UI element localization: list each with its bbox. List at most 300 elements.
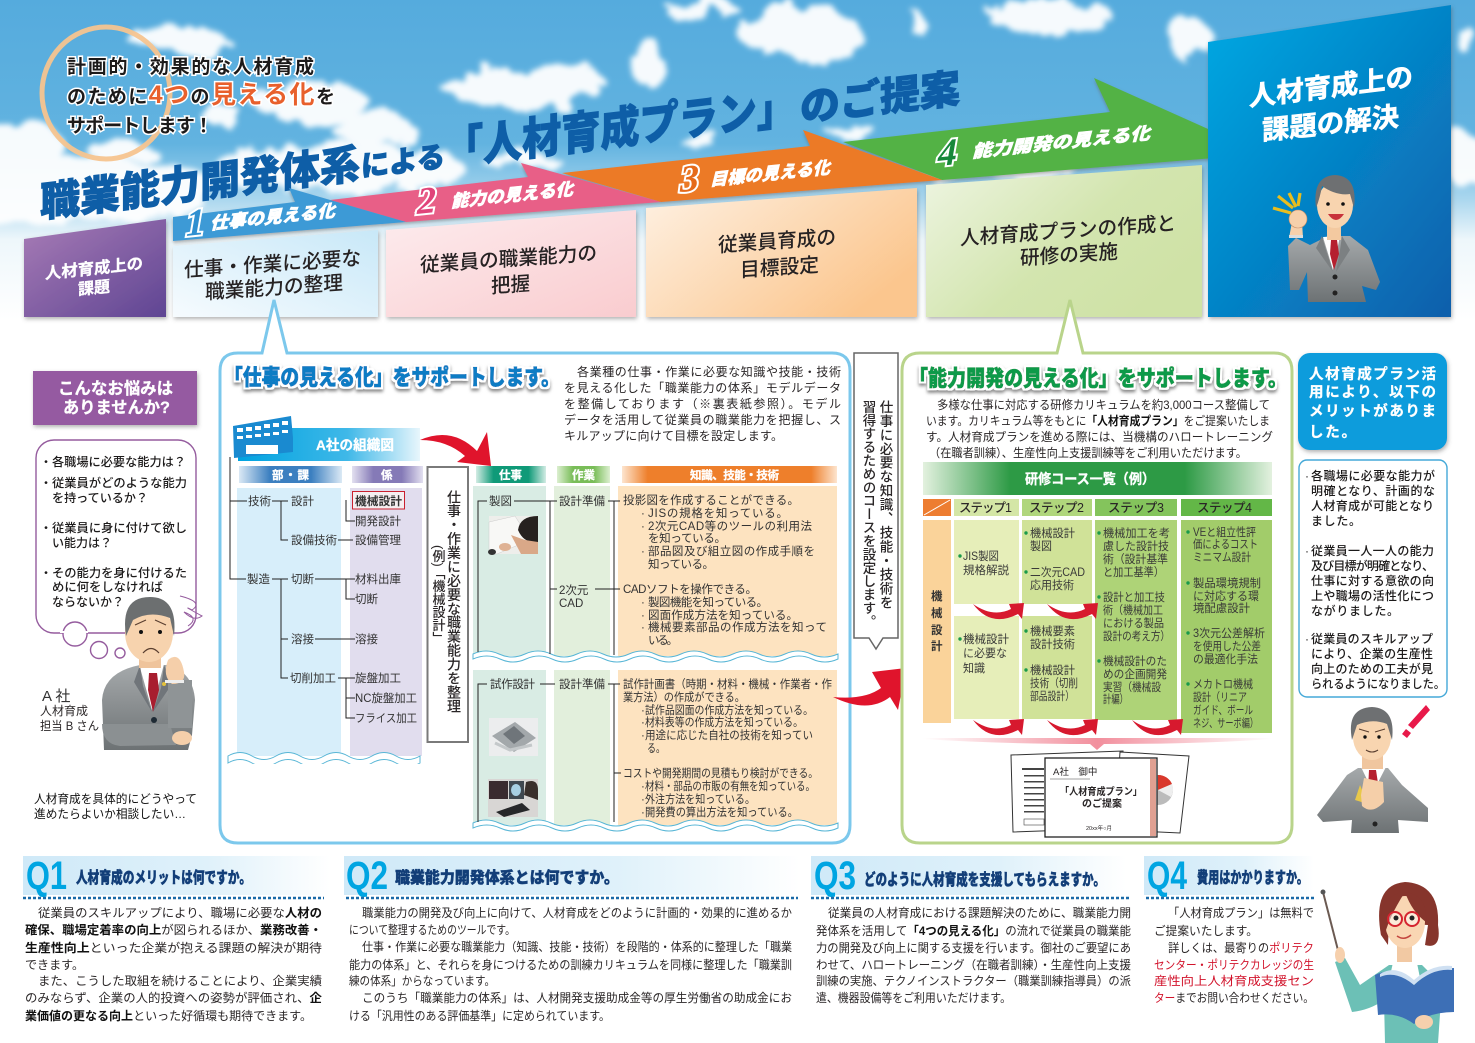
label 1: 仕事の見える化 [210, 201, 337, 233]
Q4: Q4 [1147, 854, 1188, 898]
skills text: を知っている。 [648, 531, 726, 545]
consultation note [34, 791, 197, 821]
skills text: 外注方法を知っている。 [645, 792, 755, 806]
panel intro [564, 364, 841, 443]
column headers: 係 [381, 468, 393, 482]
step 2 courses: 設計技術 [1030, 637, 1075, 651]
org labels: 切断 [291, 573, 314, 586]
step headers: ステップ1 [959, 501, 1012, 515]
panel intro: す。人材育成プランを進める際には、当機構のハロートレーニング [926, 429, 1273, 444]
icon: cheering man [1273, 175, 1380, 302]
Q4: 「人材育成プラン」は無料で [1168, 905, 1314, 920]
worry list: ・ [40, 566, 52, 580]
step 2 courses: 製図 [1030, 539, 1052, 553]
org chart header [233, 416, 420, 461]
skills text: 材料表等の作成方法を知っている。 [645, 715, 803, 729]
Q4: ターまでお問い合わせください。 [1154, 991, 1314, 1005]
main title: 「人材育成プラン」 [444, 81, 796, 175]
panel: skills development [902, 300, 1292, 843]
Q2: について整理するためのツールです。 [349, 923, 515, 937]
job and task labels: 設計準備 [559, 677, 605, 691]
person caption: A 社 [42, 688, 70, 705]
label 4 [937, 111, 1152, 175]
Q2: 仕事・作業に必要な職業能力（知識、技能・技術）を段階的・体系的に整理した「職業 [362, 939, 792, 954]
front cover: A社 御中 [1053, 766, 1097, 778]
lead copy with peach circle [42, 27, 335, 159]
box: challenge [24, 219, 166, 317]
vertical label: organize skills: 仕事・作業に必要な職業能力を整理 [446, 490, 462, 713]
step 3 courses: 機械加工を考 [1103, 526, 1170, 540]
skills text: · [641, 781, 645, 793]
step 2 courses: 応用技術 [1030, 578, 1074, 592]
skills text: · [641, 597, 645, 609]
merit heading: した。 [1309, 424, 1356, 441]
step 4 courses: の最適化手法 [1193, 652, 1258, 666]
step 4 courses: 価によるコスト [1193, 538, 1258, 551]
panel intro: います。カリキュラム等をもとに「人材育成プラン」をご提案いたしま [926, 413, 1270, 428]
step 4 courses: 設計（リニア [1193, 690, 1247, 704]
step 3 courses: 設計と加工技 [1103, 590, 1165, 604]
skills text: 試作計画書（時期・材料・機械・作業者・作 [623, 677, 832, 691]
panel intro: を整備しております（※裏表紙参照）。モデル [564, 396, 841, 411]
worry list [40, 454, 187, 609]
Q2: 練の体系」からなっています。 [349, 974, 495, 988]
worry list: い能力は？ [52, 535, 112, 550]
sheet: pie chart [1115, 752, 1189, 833]
table lines [478, 501, 621, 822]
step 3 courses: における製品 [1103, 616, 1164, 630]
consultation note: 人材育成を具体的にどうやって [34, 791, 197, 806]
vertical label: set courses [854, 353, 898, 649]
panel intro: を見える化した「職業能力の体系」モデルデータ [564, 380, 841, 395]
Q1: Q1 [26, 854, 67, 898]
merit list: 上や職場の活性化につ [1311, 588, 1434, 603]
worry list: 各職場に必要な能力は？ [52, 454, 186, 469]
label 2: 2 [416, 179, 436, 223]
skills text: · [641, 521, 645, 533]
step 3 courses: 機械設計のた [1103, 654, 1167, 668]
step 4 courses [1186, 525, 1265, 730]
step 4 courses: を使用した公差 [1193, 639, 1261, 653]
merit heading [1298, 353, 1447, 450]
box 4 [926, 165, 1202, 317]
org labels: 製造 [247, 572, 270, 586]
merit list: · [1305, 544, 1309, 558]
org labels: 旋盤加工 [355, 671, 401, 685]
arrow: org chart to skills table [420, 432, 491, 466]
skills text: · [641, 546, 645, 558]
scribble [180, 596, 202, 626]
consultation note: 進めたらよいか相談したい… [34, 807, 186, 821]
label 2 [416, 164, 575, 223]
step 4 courses: 境配慮設計 [1193, 601, 1250, 615]
proposal documents [1011, 751, 1189, 837]
sheet: schedule [1011, 751, 1125, 832]
step 3 courses: 術（設計基準 [1103, 552, 1168, 566]
step 3 courses: 計編） [1103, 692, 1128, 706]
Q1 [23, 854, 330, 1023]
box 4: 人材育成プランの作成と [960, 212, 1176, 250]
row label: 計 [931, 639, 943, 653]
Q2: 職業能力の開発及び向上に向けて、人材育成をどのように計画的・効果的に進めるか [362, 905, 792, 920]
box 3: 従業員育成の [718, 226, 836, 257]
step 4 courses: 3次元公差解析 [1193, 626, 1265, 640]
Q4: 詳しくは、最寄りのポリテク [1168, 940, 1314, 955]
icon: worried man [102, 596, 202, 750]
Q1: のみならず、企業の人的投資への姿勢が評価され、 企 [25, 990, 322, 1005]
Q1: 従業員のスキルアップにより、職場に必要な 人材の [38, 905, 322, 920]
Q4 [1144, 854, 1316, 1005]
right column: merits [1298, 353, 1447, 833]
exclamation mark [1402, 705, 1430, 738]
org labels: 開発設計 [355, 514, 401, 528]
skills text: · [641, 705, 645, 717]
Q1: できます。 [25, 958, 84, 972]
step 1 courses [958, 549, 1009, 675]
skills text: · [641, 508, 645, 520]
person caption [40, 688, 99, 733]
merit list: られるようになりました。 [1311, 677, 1445, 691]
photo: machine model [489, 718, 538, 756]
person caption: 担当 B さん [40, 719, 99, 733]
Q2: Q2 [346, 854, 388, 898]
step 2 courses: 二次元CAD [1030, 566, 1085, 579]
Q3: 訓練の実施、テクノインストラクター（職業訓練指導員）の派 [816, 973, 1131, 988]
org labels: 溶接 [291, 633, 314, 646]
panel intro: （在職者訓練）、生産性向上支援訓練等をご利用いただけます。 [929, 445, 1247, 460]
skills text: コストや開発期間の見積もり検討ができる。 [623, 766, 818, 780]
Q3: Q3 [814, 854, 856, 898]
label 3 [679, 143, 832, 201]
person caption: 人材育成 [40, 703, 88, 718]
main title: のご提案 [800, 66, 960, 131]
label 4: 4 [937, 131, 957, 175]
Q4: 産性向上人材育成支援セン [1154, 973, 1314, 988]
skills text: 開発費の算出方法を知っている。 [645, 805, 798, 819]
step 2 courses: 機械設計 [1030, 663, 1075, 677]
column headers [239, 466, 423, 483]
merit list: 及び目標が明確となり、 [1311, 558, 1434, 573]
skills table [473, 466, 838, 831]
skills text: 業方法）の作成ができる。 [623, 690, 745, 704]
arrow 1 [173, 188, 406, 241]
worry list: 従業員に身に付けて欲し [52, 520, 187, 535]
lead copy with peach circle: サポートします！ [67, 114, 213, 137]
Q1: 生産性向上 といった企業が抱える課題の解決が期待 [25, 940, 322, 955]
Q4: センター・ポリテクカレッジの生 [1154, 958, 1314, 972]
org labels: 材料出庫 [355, 572, 401, 586]
box 4: 研修の実施 [1020, 240, 1118, 270]
box 3 [646, 188, 917, 317]
step 4 courses: ミニマム設計 [1193, 550, 1251, 564]
box 1 [173, 230, 378, 317]
skills text: 機械要素部品の作成方法を知って [648, 620, 827, 634]
Q1: また、こうした取組を続けることにより、企業実績 [38, 973, 322, 988]
Q2: ける「汎用性のある評価基準」に定められています。 [349, 1008, 610, 1023]
org columns [228, 488, 424, 772]
Q3: どのように人材育成を支援してもらえますか。 [864, 870, 1105, 889]
skills text: · [641, 794, 645, 806]
table headers: 仕事 [499, 468, 522, 482]
Q4: 費用はかかりますか。 [1197, 868, 1308, 887]
Q1: 人材育成のメリットは何ですか。 [76, 868, 251, 887]
column headers: 部・課 [272, 468, 310, 482]
step boxes [24, 165, 1202, 317]
box 3: 目標設定 [740, 253, 819, 282]
step 1 courses: 機械設計 [963, 632, 1009, 646]
merit list: · [1305, 469, 1309, 483]
Q3: 発体系を活用して「4つの見える化」の流れで従業員の職業能 [816, 924, 1131, 938]
result heading [1249, 61, 1413, 146]
label 3: 目標の見える化 [710, 158, 832, 190]
panel heading: 「能力開発の見える化」をサポートします。 [909, 366, 1287, 391]
Q2: 能力の体系」と、それらを身につけるための訓練カリキュラムを同様に整理した「職業訓 [349, 957, 792, 972]
icon: man with exclamation [1317, 705, 1430, 833]
job and task labels: CAD [559, 598, 583, 610]
worry list: ・ [40, 521, 52, 535]
merit list [1299, 460, 1447, 697]
skills text [623, 493, 832, 819]
box 1: 職業能力の整理 [205, 271, 343, 304]
step 3 courses: 実習（機械設 [1103, 680, 1161, 694]
worry list: ・ [40, 455, 52, 469]
progress arrows [973, 603, 1183, 735]
step 4 courses: VEと組立性評 [1193, 525, 1256, 539]
course cells [923, 520, 1272, 733]
step 1 courses: に必要な [963, 647, 1007, 660]
merit list: 向上のための工夫が見 [1311, 661, 1433, 676]
table columns [473, 486, 838, 831]
lead copy with peach circle: 計画的・効果的な人材育成 [67, 55, 314, 78]
box: challenge: 課題 [78, 278, 110, 299]
result panel [1208, 5, 1451, 317]
step 2 courses: 機械設計 [1030, 526, 1075, 540]
table headers: 作業 [572, 468, 595, 482]
skills text: · [641, 622, 645, 634]
arrow labels [186, 111, 1152, 245]
step 4 courses: に対応する環 [1193, 590, 1259, 603]
step 4 courses: メカトロ機械 [1193, 677, 1253, 691]
result heading: 課題の解決 [1262, 101, 1399, 146]
step 1 courses: 知識 [963, 661, 985, 675]
panel intro: 多様な仕事に対応する研修カリキュラムを約3,000コース整備して [937, 397, 1270, 412]
merit list: 従業員のスキルアップ [1311, 631, 1433, 646]
org labels: NC旋盤加工 [355, 691, 417, 705]
course table [923, 462, 1272, 750]
step arrows [173, 78, 1264, 241]
org labels: 切削加工 [290, 671, 336, 685]
merit list: 各職場に必要な能力が [1311, 468, 1435, 483]
icon: woman with pointer and book [1320, 882, 1454, 1043]
Q4: ご提案いたします。 [1154, 923, 1258, 938]
table headers: 知識、技能・技術 [690, 468, 780, 482]
org labels: 機械設計 [355, 494, 403, 508]
merit heading: 用により、以下の [1309, 384, 1436, 401]
skills text: 試作品図面の作成方法を知っている。 [645, 703, 813, 717]
arrow 3 [562, 130, 942, 202]
panel: job visualization [220, 300, 850, 843]
skills text: · [641, 717, 645, 729]
skills text: · [641, 610, 645, 622]
table headers [476, 466, 837, 483]
org chart header: A社の組織図 [316, 437, 394, 453]
worry list: ・ [40, 476, 52, 490]
main title: による [361, 141, 445, 184]
worry heading: ありませんか? [63, 398, 170, 417]
thought bubble [36, 440, 196, 658]
org labels: 設備技術 [291, 533, 337, 547]
step 3 courses: 設計の考え方） [1103, 629, 1170, 643]
panel frame with pointer [902, 300, 1292, 843]
sky background with clouds [0, 0, 1475, 320]
skills text: 知っている。 [648, 557, 714, 571]
skills text: 製図機能を知っている。 [648, 595, 768, 609]
org labels: フライス加工 [355, 712, 417, 725]
box 2: 把握 [491, 272, 530, 298]
step 3 courses [1097, 526, 1170, 706]
arrow 4 [843, 78, 1264, 180]
skills text: る。 [647, 743, 665, 755]
skills text: いる。 [648, 635, 678, 647]
skills text: 図面作成方法を知っている。 [648, 608, 798, 622]
step 4 courses: 製品環境規制 [1193, 576, 1261, 590]
label 2: 能力の見える化 [451, 179, 575, 211]
front cover: のご提案 [1082, 797, 1122, 810]
step headers: ステップ2 [1029, 501, 1084, 515]
arrow: skills table to course list [833, 668, 906, 710]
front cover: 「人材育成プラン」 [1060, 785, 1142, 798]
Q3: 遣、機器設備等をご利用いただけます。 [816, 990, 1011, 1005]
main title: 職業能力開発体系 [40, 141, 360, 226]
lead copy with peach circle: のために4つの見える化を [67, 81, 335, 109]
Q2: このうち「職業能力の体系」は、人材開発支援助成金等の厚生労働省の助成金にお [362, 991, 792, 1005]
skills text: 2次元CAD等のツールの利用法 [648, 519, 812, 533]
skills text: 投影図を作成することができる。 [623, 493, 799, 507]
step 3 courses: 術（機械加工 [1103, 603, 1163, 617]
worry heading [33, 371, 197, 425]
step 1 courses: 規格解説 [963, 563, 1009, 577]
label 1 [186, 187, 337, 245]
step headers: ステップ3 [1108, 501, 1164, 515]
merit list: 人材育成が可能となり [1311, 498, 1434, 513]
row label: 機 [931, 589, 943, 603]
worry heading: こんなお悩みは [58, 379, 173, 398]
box 1: 仕事・作業に必要な [184, 247, 361, 282]
org labels: 設備管理 [355, 533, 401, 547]
Q3: わせて、ハロートレーニング（在職者訓練）・生産性向上支援 [816, 957, 1131, 972]
step 3 courses: めの企画開発 [1103, 667, 1167, 681]
panel heading: 「仕事の見える化」をサポートします。 [224, 365, 560, 390]
step 1 courses: JIS製図 [963, 549, 999, 563]
job and task labels: 2次元 [559, 584, 589, 597]
merit list: 明確となり、計画的な [1311, 483, 1435, 498]
arrow 2 [330, 163, 661, 222]
merit list: 仕事に対する意欲の向 [1311, 573, 1434, 588]
row label: 設 [931, 624, 943, 637]
job and task labels: 製図 [489, 494, 512, 508]
skills text: 材料・部品の市販の有無を知っている。 [645, 779, 815, 793]
merit heading: 人材育成プラン活 [1309, 365, 1436, 383]
skills text: CADソフトを操作できる。 [623, 582, 757, 596]
box 2: 従業員の職業能力の [420, 242, 597, 277]
vertical label: organize skills: (例)「機械設計」 [430, 545, 446, 645]
step headers [923, 499, 1272, 516]
Q3: 従業員の人材育成における課題解決のために、職業能力開 [828, 905, 1131, 920]
step 3 courses: と加工基準） [1103, 565, 1164, 579]
FAQ [23, 854, 1454, 1043]
step 2 courses [1024, 526, 1085, 703]
skills text: JISの規格を知っている。 [648, 506, 788, 520]
merit heading: メリットがありま [1309, 402, 1436, 420]
skills text: · [641, 730, 645, 742]
skills text: 部品図及び組立図の作成手順を [648, 544, 815, 558]
merit list: 従業員一人一人の能力 [1311, 543, 1434, 558]
label 4: 能力開発の見える化 [972, 124, 1152, 161]
box: challenge: 人材育成上の [45, 254, 143, 283]
row label [931, 589, 943, 653]
org labels: 設計 [291, 494, 314, 508]
panel intro: 各業種の仕事・作業に必要な知識や技能・技術 [577, 364, 841, 379]
panel intro: キルアップに向けて目標を設定します。 [564, 428, 783, 443]
Q2: 職業能力開発体系とは何ですか。 [395, 868, 619, 887]
Q1: 確保、職場定着率の向上 が図られるほか、 業務改善・ [25, 922, 322, 937]
worry list: その能力を身に付けるた [52, 565, 187, 580]
org labels: 切断 [355, 593, 378, 606]
row label: 械 [931, 606, 943, 620]
pink bracket [923, 738, 1272, 750]
worry list: めに何をしなければ [52, 579, 163, 594]
merit list: · [1305, 632, 1309, 646]
Q3: 力の開発及び向上に関する支援を行います。御社のご要望にあ [816, 940, 1131, 955]
main title [40, 61, 960, 226]
step headers: ステップ4 [1197, 501, 1252, 515]
left column: worries [33, 371, 202, 821]
worry list: 従業員がどのような能力 [52, 475, 187, 490]
org labels: 技術 [248, 494, 271, 508]
Q3 [811, 854, 1131, 1005]
step 2 courses: 技術（切削 [1030, 676, 1078, 690]
merit list: ながりました。 [1311, 603, 1399, 618]
skills text: · [641, 807, 645, 819]
merit list: ました。 [1311, 514, 1361, 528]
step 4 courses: ガイド、ボール [1193, 704, 1253, 717]
photo: CAD workstation [488, 779, 538, 817]
front cover [1045, 758, 1157, 837]
worry list: を持っているか？ [52, 490, 148, 505]
org lines [230, 457, 355, 718]
course table title [923, 462, 1272, 495]
skills text: 用途に応じた自社の技術を知ってい [645, 728, 813, 742]
job and task labels: 設計準備 [559, 494, 605, 508]
course table title: 研修コース一覧（例） [1025, 471, 1155, 487]
vertical label: organize skills [428, 467, 468, 742]
Q1: 業価値の更なる向上といった好循環も期待できます。 [25, 1008, 312, 1023]
step 2 courses: 機械要素 [1030, 624, 1075, 638]
vertical label: set courses: 仕事に必要な知識、技能・技術を [878, 400, 893, 609]
panel intro [926, 397, 1273, 460]
photo: drafting [488, 516, 538, 555]
box 2 [386, 210, 636, 317]
step 4 courses: ネジ、サーボ編） [1193, 717, 1258, 730]
org chart [228, 416, 424, 772]
job and task labels [489, 494, 605, 691]
org labels: 溶接 [355, 633, 378, 646]
step 2 courses: 部品設計） [1030, 689, 1074, 703]
job and task labels: 試作設計 [490, 677, 536, 691]
front cover: 20xx年○月 [1086, 824, 1112, 832]
panel intro: データを活用して従業員の職業能力を把握し、ス [564, 412, 841, 427]
result heading: 人材育成上の [1249, 61, 1413, 112]
